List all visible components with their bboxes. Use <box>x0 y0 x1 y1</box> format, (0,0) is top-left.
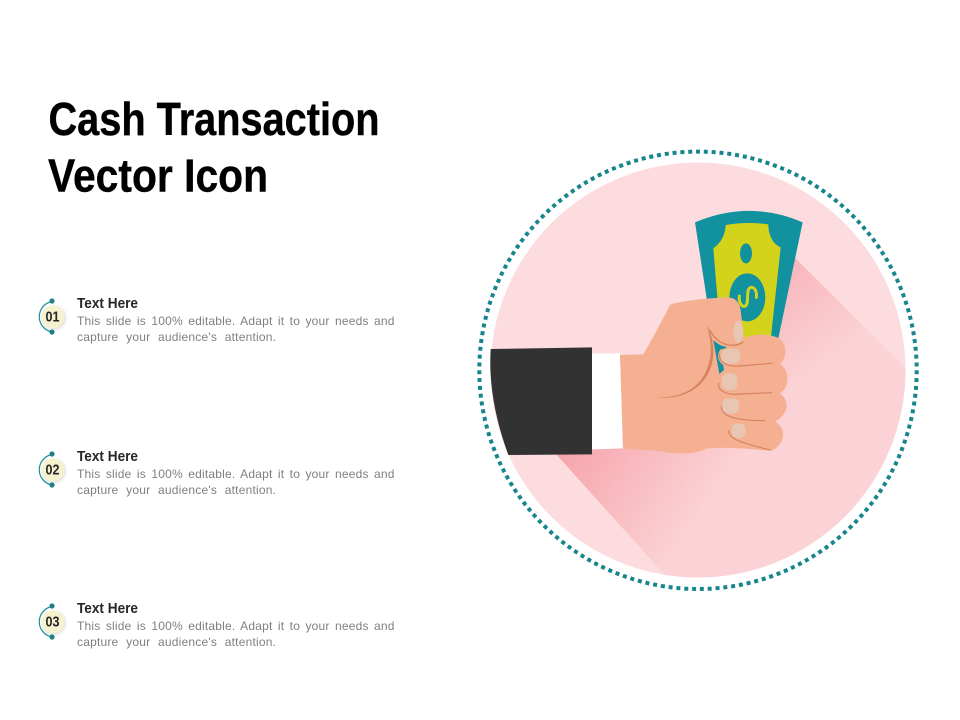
item body text: capture your audience's attention. <box>77 635 276 649</box>
number badge 02: 02 <box>46 462 60 478</box>
dotted ring <box>479 152 917 589</box>
sleeve <box>490 347 592 455</box>
item body text: This slide is 100% editable. Adapt it to your needs and <box>77 467 395 481</box>
item heading: Text Here <box>77 601 138 617</box>
item body text <box>77 467 395 497</box>
palm crease <box>656 325 713 398</box>
number badge 02 <box>39 451 66 488</box>
gap between thumb and fingers <box>713 340 727 374</box>
item body text: This slide is 100% editable. Adapt it to your needs and <box>77 619 395 633</box>
list item 03 <box>39 601 395 649</box>
list item 02 <box>39 449 395 497</box>
finger creases <box>719 353 772 450</box>
icon: hand holding cash <box>490 211 803 455</box>
number badge 01 <box>39 298 66 335</box>
thumb crease <box>710 330 743 345</box>
item heading: Text Here <box>77 449 138 465</box>
finger base <box>718 345 742 367</box>
title: Vector Icon <box>48 150 268 202</box>
item body text <box>77 314 395 344</box>
item body text: capture your audience's attention. <box>77 483 276 497</box>
long shadow <box>556 258 906 578</box>
item body text: This slide is 100% editable. Adapt it to your needs and <box>77 314 395 328</box>
list item 01 <box>39 296 395 344</box>
item body text <box>77 619 395 649</box>
number badge 01: 01 <box>46 310 60 326</box>
pink circle background <box>490 162 906 578</box>
banknote <box>695 211 803 374</box>
finger nails <box>721 321 745 438</box>
hand <box>620 297 788 453</box>
number badge 03: 03 <box>46 614 60 630</box>
item heading: Text Here <box>77 296 138 312</box>
title <box>48 93 380 202</box>
item body text: capture your audience's attention. <box>77 330 276 344</box>
number badge 03 <box>39 603 66 640</box>
title: Cash Transaction <box>48 93 380 145</box>
shirt cuff <box>592 353 623 449</box>
